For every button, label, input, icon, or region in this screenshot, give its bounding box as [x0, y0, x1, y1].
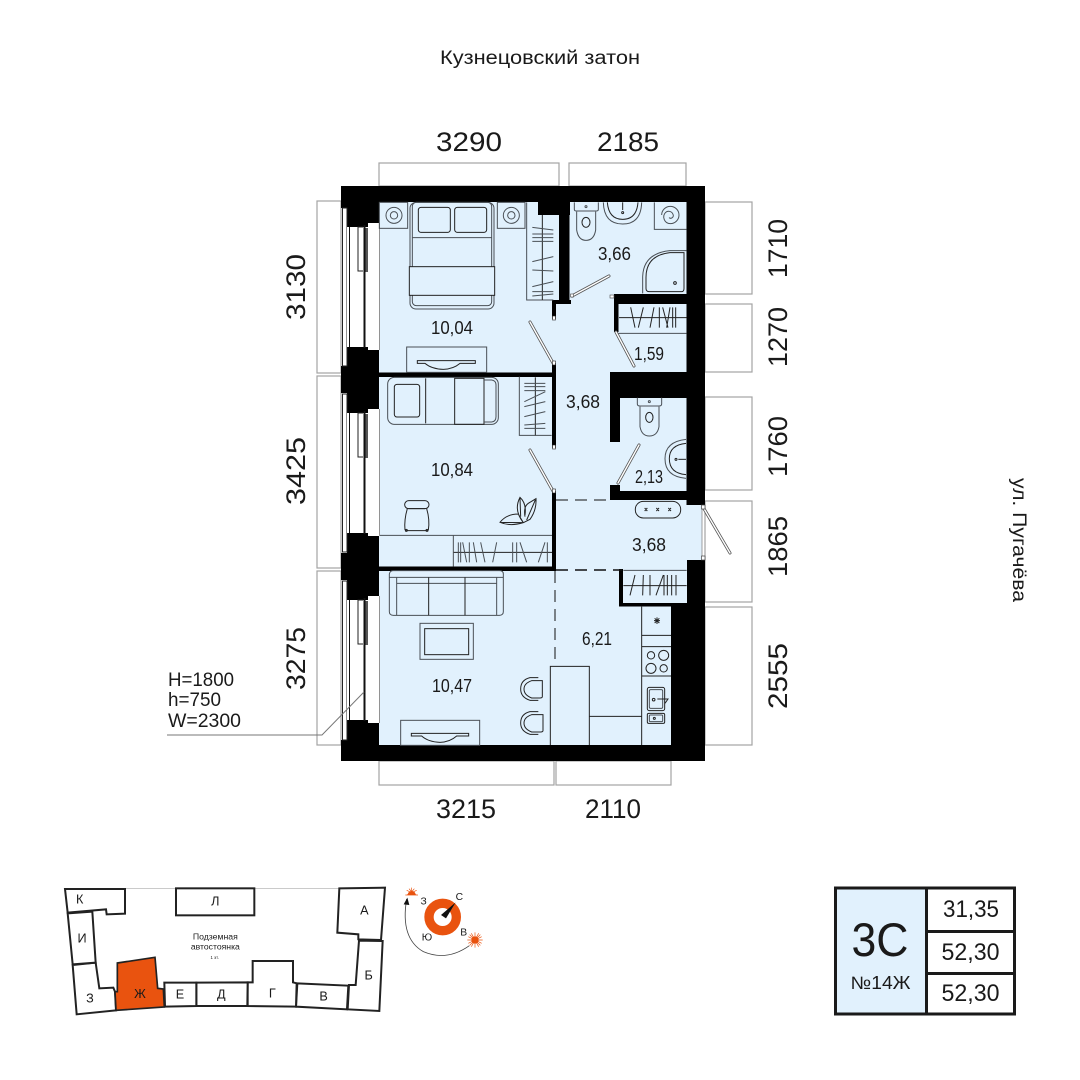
window spec: h=750	[168, 690, 221, 711]
furniture: bedroom	[379, 202, 553, 372]
building letters: Л	[211, 895, 219, 909]
building letters: Г	[269, 986, 276, 1000]
dimension labels: 1865	[763, 516, 793, 577]
window spec	[168, 670, 241, 732]
window spec leader line	[167, 692, 364, 735]
site plan	[65, 888, 385, 1014]
dimension labels: 1760	[763, 416, 793, 477]
furniture: bedroom 2	[380, 377, 552, 567]
room areas: 3,68	[566, 392, 600, 412]
dimension labels	[281, 127, 793, 824]
building letters: И	[77, 932, 87, 946]
window spec: H=1800	[168, 670, 234, 691]
street label: north: Кузнецовский затон	[440, 48, 640, 69]
cardinal letters: С	[456, 892, 464, 903]
areas: 31,35	[943, 896, 999, 923]
sun: evening	[405, 888, 418, 895]
room areas	[431, 244, 666, 696]
furniture: hall and kitchen	[550, 501, 687, 745]
parking label	[191, 931, 240, 960]
building letters: Е	[176, 988, 184, 1002]
room areas: 1,59	[634, 344, 664, 364]
dimension labels: 2555	[763, 643, 793, 709]
dimension boxes	[317, 163, 752, 785]
dimension labels: 3215	[436, 794, 496, 824]
apartment floor fill	[379, 202, 702, 745]
window spec: W=2300	[168, 711, 241, 732]
compass	[404, 888, 483, 956]
dimension labels: 3425	[281, 437, 311, 505]
room areas: 10,47	[432, 676, 472, 696]
apartment number: №14Ж	[850, 973, 911, 993]
sun: morning	[467, 932, 483, 948]
furniture: bathroom	[574, 202, 687, 478]
room areas: 3,68	[632, 535, 666, 555]
dimension labels: 1270	[763, 307, 793, 367]
dimension labels: 3130	[281, 254, 311, 320]
room areas: 2,13	[635, 467, 663, 487]
building letters: А	[360, 903, 369, 917]
walls	[341, 186, 705, 761]
cardinal letters: З	[421, 897, 427, 908]
dimension labels: 2185	[597, 127, 659, 157]
doors	[530, 276, 730, 560]
furniture: living room	[389, 571, 543, 745]
cardinal letters: Ю	[422, 932, 432, 943]
room areas: 3,66	[598, 244, 631, 264]
window 1	[342, 208, 380, 366]
parking label: 1 эт.	[210, 955, 219, 960]
cardinal letters	[421, 892, 467, 943]
window 3	[342, 581, 380, 740]
parking label: автостоянка	[191, 941, 240, 951]
areas: 52,30	[942, 939, 1000, 966]
building letters: К	[76, 892, 84, 906]
building letters: В	[319, 990, 328, 1004]
zone dashed lines	[555, 500, 622, 666]
dimension labels: 2110	[585, 794, 641, 824]
building letters	[76, 892, 373, 1006]
parking label: Подземная	[193, 931, 238, 941]
dimension labels: 3290	[436, 127, 502, 157]
dimension labels: 3275	[281, 627, 311, 690]
building letters: Д	[217, 988, 226, 1002]
highlighted building	[115, 957, 164, 1010]
street label: east: ул. Пугачёва	[1008, 478, 1029, 602]
cardinal letters: В	[460, 927, 467, 938]
room areas: 6,21	[582, 629, 612, 649]
apartment info table	[836, 888, 1014, 1014]
areas	[942, 896, 1000, 1007]
window 2	[342, 394, 380, 552]
apartment type: 3С	[852, 913, 908, 966]
dimension labels: 1710	[763, 219, 793, 278]
building letters: Б	[365, 968, 373, 982]
building letters: Ж	[134, 987, 146, 1001]
room areas: 10,04	[431, 318, 473, 338]
areas: 52,30	[942, 980, 1000, 1007]
building letters: З	[86, 992, 94, 1006]
room areas: 10,84	[431, 460, 473, 480]
